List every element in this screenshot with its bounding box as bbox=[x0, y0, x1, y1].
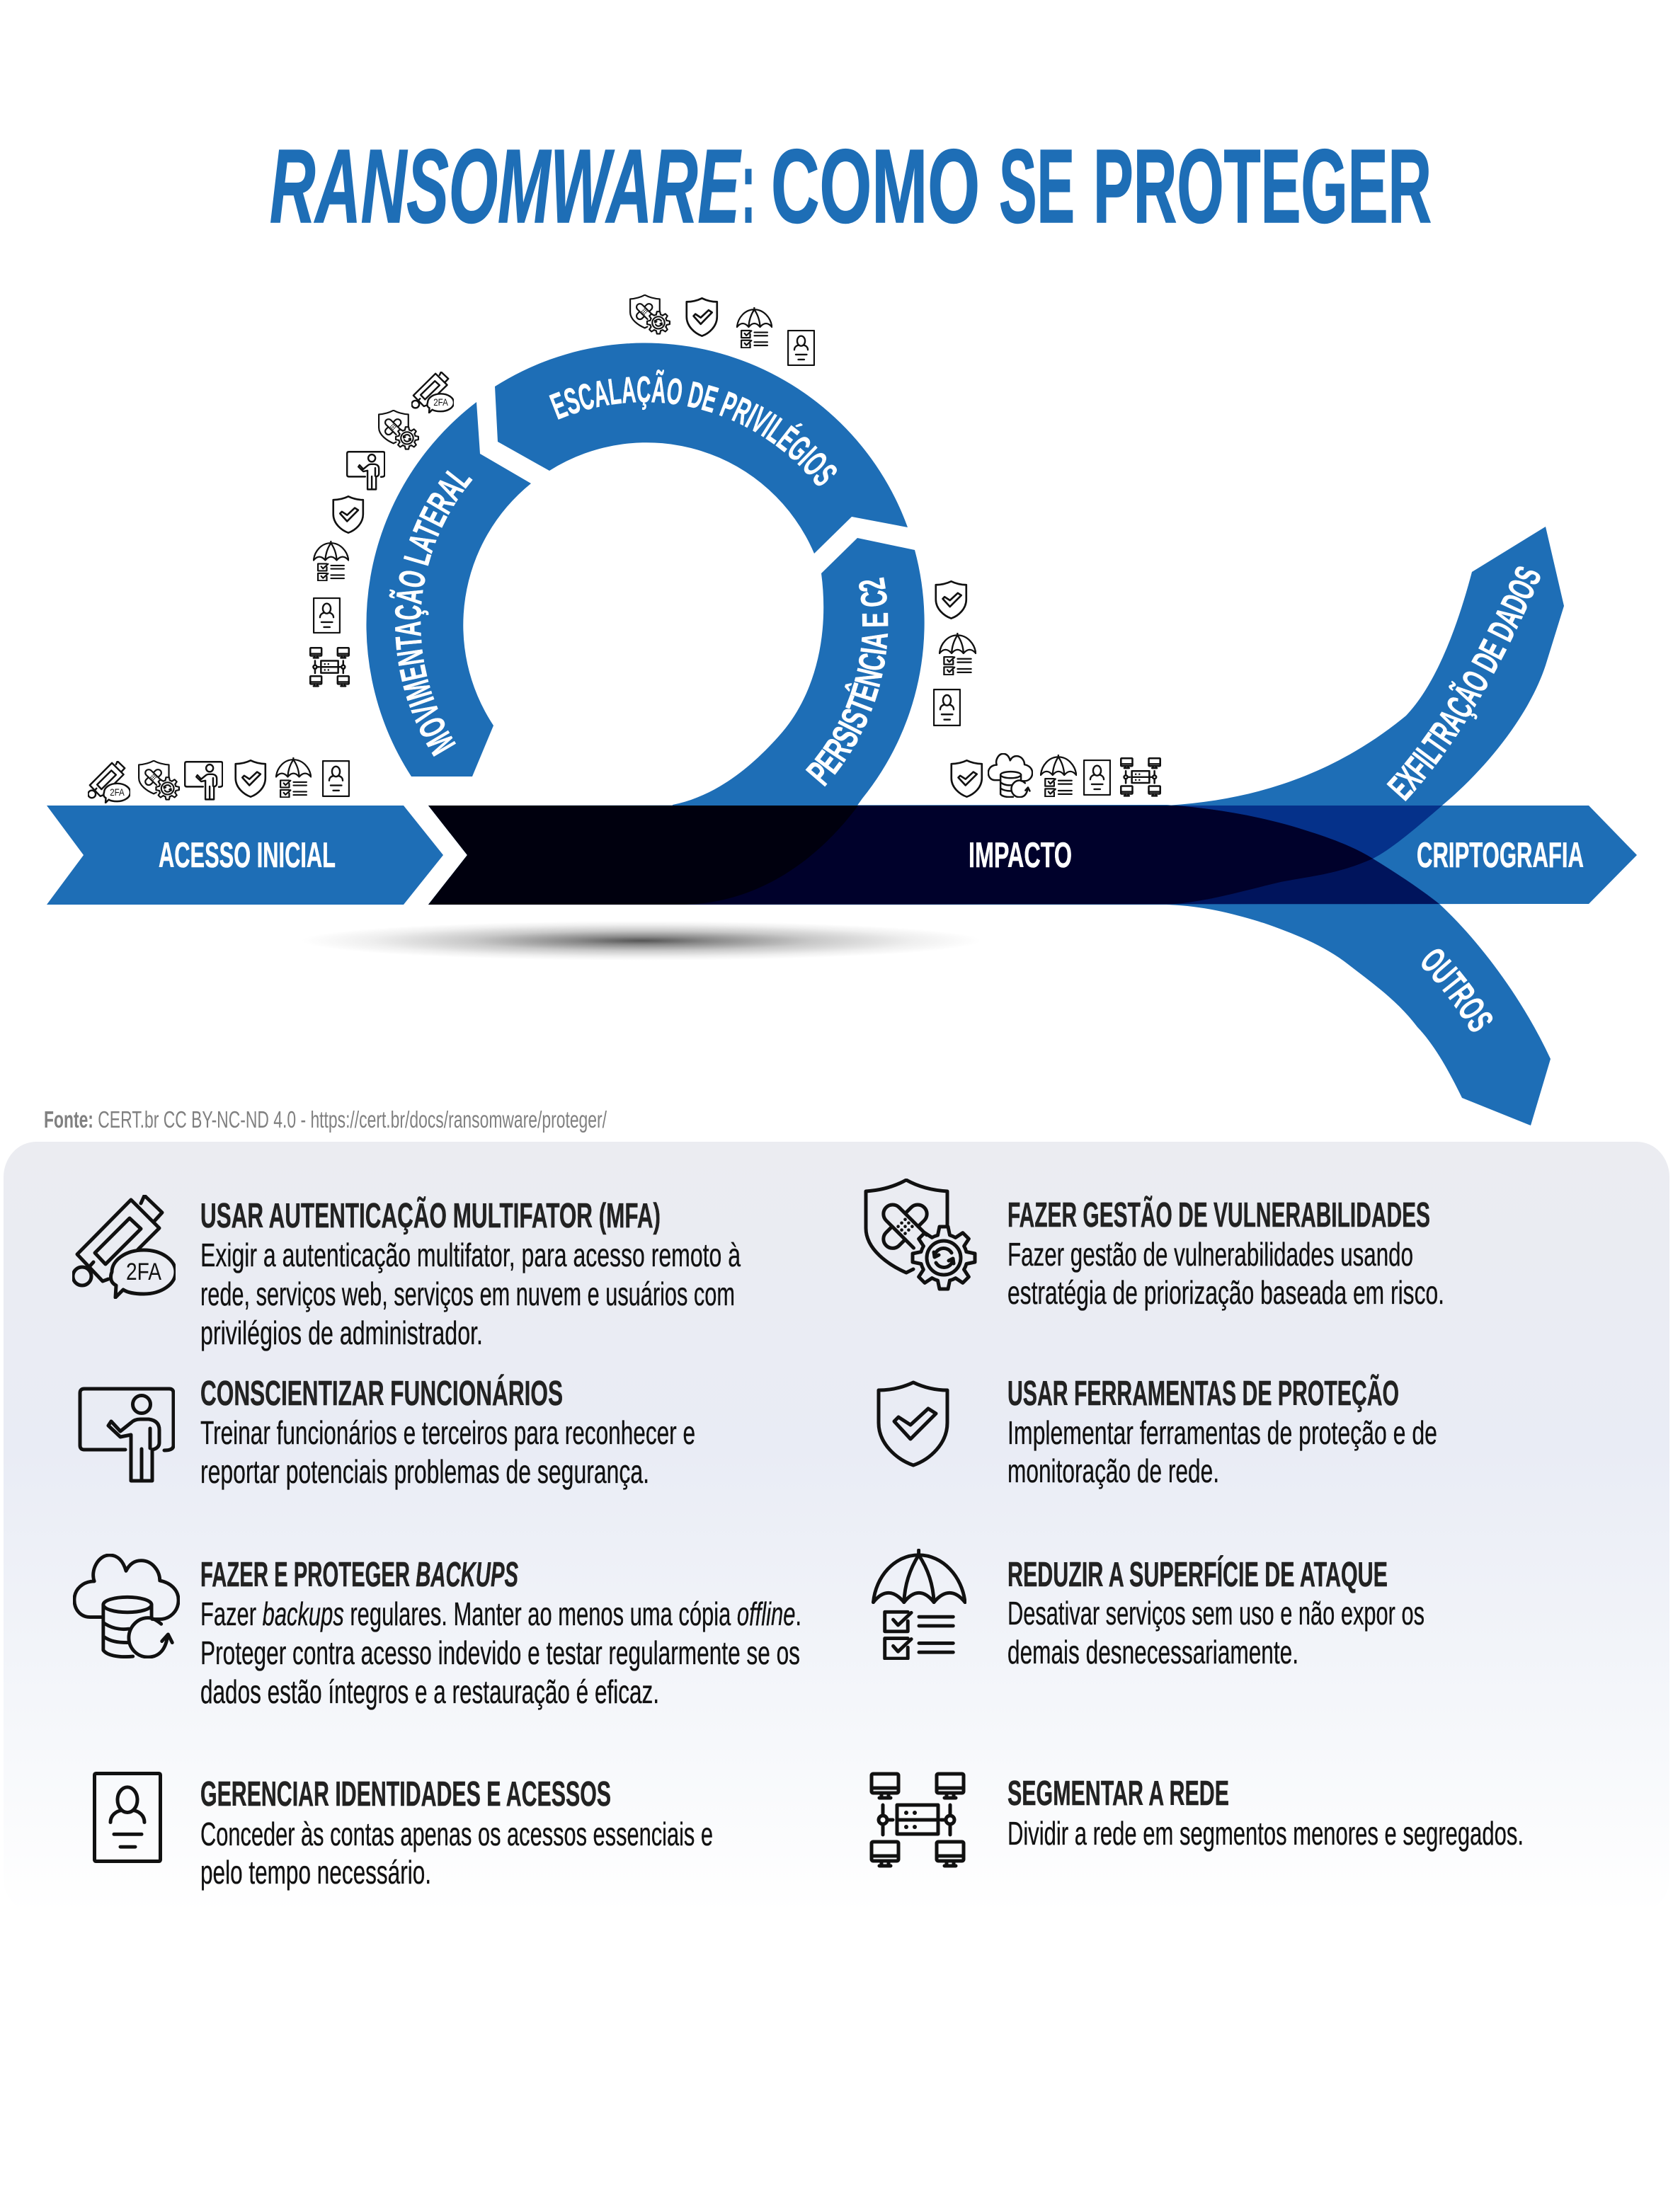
arrow: exfiltração de dados branch bbox=[428, 527, 1564, 905]
item: reduzir a superfície de ataque: Desativar serviços sem uso e não expor os bbox=[1007, 1595, 1424, 1632]
title: RANSOMWARE bbox=[270, 128, 742, 245]
item: fazer e proteger backups: Proteger contra acesso indevido e testar regularmente se os bbox=[200, 1634, 800, 1671]
label: outros: OUTROS bbox=[1422, 949, 1492, 1032]
item: segmentar a rede: SEGMENTAR A REDE bbox=[1007, 1775, 1229, 1813]
arrow: outros branch bbox=[428, 805, 1551, 1125]
label: persistência e C2: PERSISTÊNCIA E C2 bbox=[806, 578, 888, 787]
item: usar ferramentas de proteção: monitoração de rede. bbox=[1007, 1452, 1219, 1489]
item: usar autenticação multifator: USAR AUTENTICAÇÃO MULTIFATOR (MFA) bbox=[200, 1197, 661, 1235]
item: usar autenticação multifator: privilégios de administrador. bbox=[200, 1314, 483, 1351]
ring segment: movimentação lateral bbox=[366, 402, 531, 777]
item: usar ferramentas de proteção bbox=[879, 1375, 1437, 1489]
item: conscientizar funcionários: CONSCIENTIZAR FUNCIONÁRIOS bbox=[200, 1375, 563, 1413]
panel: recommendations bbox=[4, 1142, 1669, 1913]
item: fazer e proteger backups: dados estão íntegros e a restauração é eficaz. bbox=[200, 1673, 659, 1710]
item: reduzir a superfície de ataque: demais desnecessariamente. bbox=[1007, 1634, 1298, 1671]
item: fazer e proteger backups bbox=[74, 1555, 801, 1710]
item: reduzir a superfície de ataque: REDUZIR A SUPERFÍCIE DE ATAQUE bbox=[1007, 1556, 1388, 1594]
item: gerenciar identidades e acessos: pelo tempo necessário. bbox=[200, 1854, 431, 1891]
item: usar autenticação multifator bbox=[73, 1196, 741, 1351]
ring segment: movimentação lateral: MOVIMENTAÇÃO LATERAL bbox=[389, 470, 473, 757]
label: exfiltração de dados: EXFILTRAÇÃO DE DADOS bbox=[1386, 566, 1541, 801]
item: usar autenticação multifator: rede, serviços web, serviços em nuvem e usuários com bbox=[200, 1276, 735, 1312]
item: usar ferramentas de proteção: USAR FERRAMENTAS DE PROTEÇÃO bbox=[1007, 1375, 1399, 1413]
item: fazer e proteger backups: Fazer backups regulares. Manter ao menos uma cópia offline. bbox=[200, 1595, 801, 1632]
item: reduzir a superfície de ataque bbox=[873, 1550, 1424, 1671]
item: fazer e proteger backups: FAZER E PROTEGER BACKUPS bbox=[200, 1556, 518, 1594]
item: conscientizar funcionários bbox=[80, 1375, 695, 1490]
title: COMO bbox=[771, 128, 980, 245]
label: impacto: IMPACTO bbox=[969, 835, 1072, 875]
title: : bbox=[741, 128, 755, 245]
icon row: acesso inicial bbox=[88, 758, 349, 803]
arrow: impacto and criptografia bar bbox=[428, 806, 1637, 905]
ring segment: escalação de privilégios: ESCALAÇÃO DE PRIVILÉGIOS bbox=[549, 369, 837, 486]
item: gerenciar identidades e acessos: Conceder às contas apenas os acessos essenciais e bbox=[200, 1816, 713, 1852]
source credit: Fonte: CERT.br CC BY-NC-ND 4.0 - https://cert.br/docs/ransomware/proteger/ bbox=[44, 1106, 607, 1133]
icon arc: escalação de privilégios bbox=[630, 295, 814, 365]
item: fazer gestão de vulnerabilidades bbox=[866, 1180, 1444, 1311]
item: usar autenticação multifator: Exigir a autenticação multifator, para acesso remoto à bbox=[200, 1237, 741, 1273]
item: usar ferramentas de proteção: Implementar ferramentas de proteção e de bbox=[1007, 1414, 1437, 1451]
item: gerenciar identidades e acessos: GERENCIAR IDENTIDADES E ACESSOS bbox=[200, 1775, 611, 1813]
icon column: movimentação lateral bbox=[310, 372, 454, 686]
title bbox=[270, 128, 1432, 245]
item: segmentar a rede bbox=[872, 1774, 1524, 1866]
label: acesso inicial: ACESSO INICIAL bbox=[159, 835, 336, 875]
icon column: persistência e C2 bbox=[934, 581, 976, 726]
item: conscientizar funcionários: Treinar funcionários e terceiros para reconhecer e bbox=[200, 1414, 695, 1451]
ring segment: escalação de privilégios bbox=[495, 343, 908, 554]
item: conscientizar funcionários: reportar potenciais problemas de segurança. bbox=[200, 1453, 649, 1490]
arrow: acesso inicial bbox=[47, 806, 443, 905]
title: SE bbox=[999, 128, 1075, 245]
ground shadow bbox=[302, 921, 981, 961]
title: PROTEGER bbox=[1093, 128, 1432, 245]
icon row: impacto bbox=[952, 754, 1160, 797]
arrow: ring segment persistência e C2 bbox=[673, 538, 925, 905]
item: fazer gestão de vulnerabilidades: estratégia de priorização baseada em risco. bbox=[1007, 1274, 1444, 1311]
item: fazer gestão de vulnerabilidades: Fazer gestão de vulnerabilidades usando bbox=[1007, 1236, 1413, 1273]
item: gerenciar identidades e acessos bbox=[95, 1773, 713, 1891]
